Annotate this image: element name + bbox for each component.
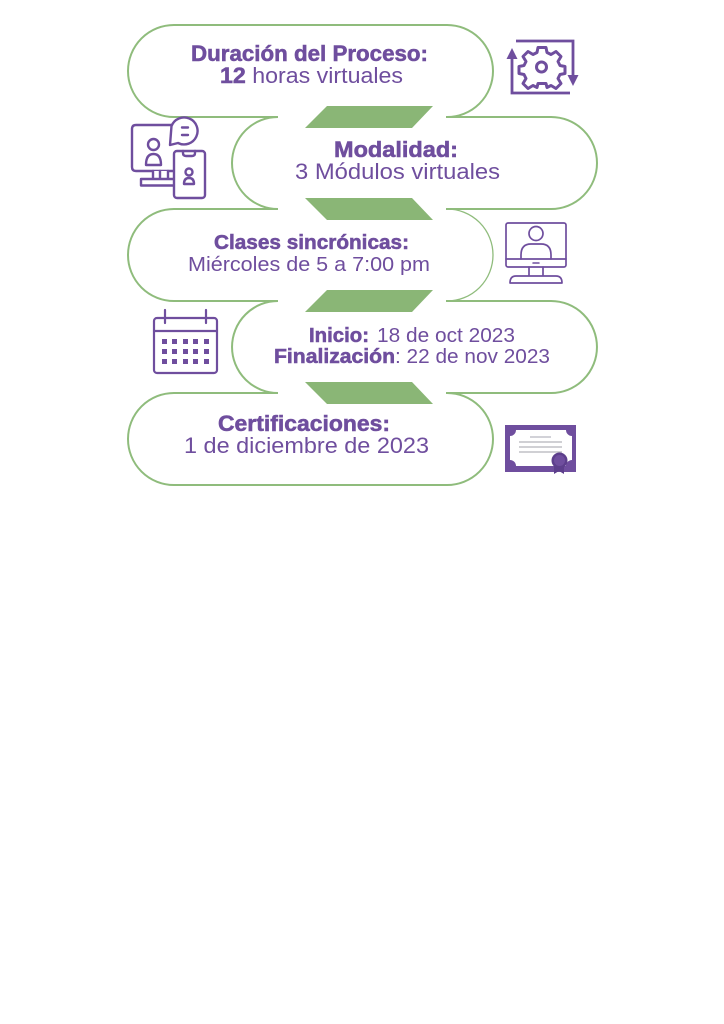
text: dates: : 22 de nov 2023 <box>395 345 550 368</box>
icon: computer and phone with chat <box>132 117 205 198</box>
text: certifications: 1 de diciembre de 2023 <box>184 433 429 458</box>
text: duration: Duración del Proceso: <box>191 41 428 66</box>
panel: certifications pill <box>128 393 493 485</box>
pill outline: classes <box>128 209 278 301</box>
icon: calendar <box>154 310 217 373</box>
text: classes: Miércoles de 5 a 7:00 pm <box>188 253 430 276</box>
icon: person on monitor <box>506 223 566 283</box>
text: dates <box>274 324 550 368</box>
text: duration: 12 horas virtuales <box>220 63 403 88</box>
pill outline: certifications <box>128 393 493 485</box>
text: certifications: Certificaciones: <box>218 411 390 436</box>
text: classes: Clases sincrónicas: <box>214 232 409 254</box>
panel: synchronous classes pill <box>128 209 493 301</box>
icon: certificate <box>505 425 576 474</box>
text: modality: 3 Módulos virtuales <box>295 159 500 184</box>
panel: modality pill <box>232 117 597 209</box>
pill outline: classes right side <box>446 209 493 301</box>
pill outline: duration <box>128 25 493 117</box>
connector bands <box>305 106 433 404</box>
pill outline: dates <box>232 301 597 393</box>
text: certifications <box>184 411 429 458</box>
text: modality: Modalidad: <box>334 137 458 162</box>
panel: duration pill <box>128 25 493 117</box>
panel: dates pill <box>232 301 597 393</box>
text: dates: Inicio: <box>309 325 369 347</box>
text: classes <box>188 232 430 276</box>
icon: gear with cycle arrows <box>506 41 578 93</box>
text: duration <box>191 41 428 88</box>
text: dates: Finalización <box>274 346 395 368</box>
text: dates: 18 de oct 2023 <box>377 324 515 347</box>
pill outline: modality <box>232 117 597 209</box>
text: modality <box>295 137 500 184</box>
